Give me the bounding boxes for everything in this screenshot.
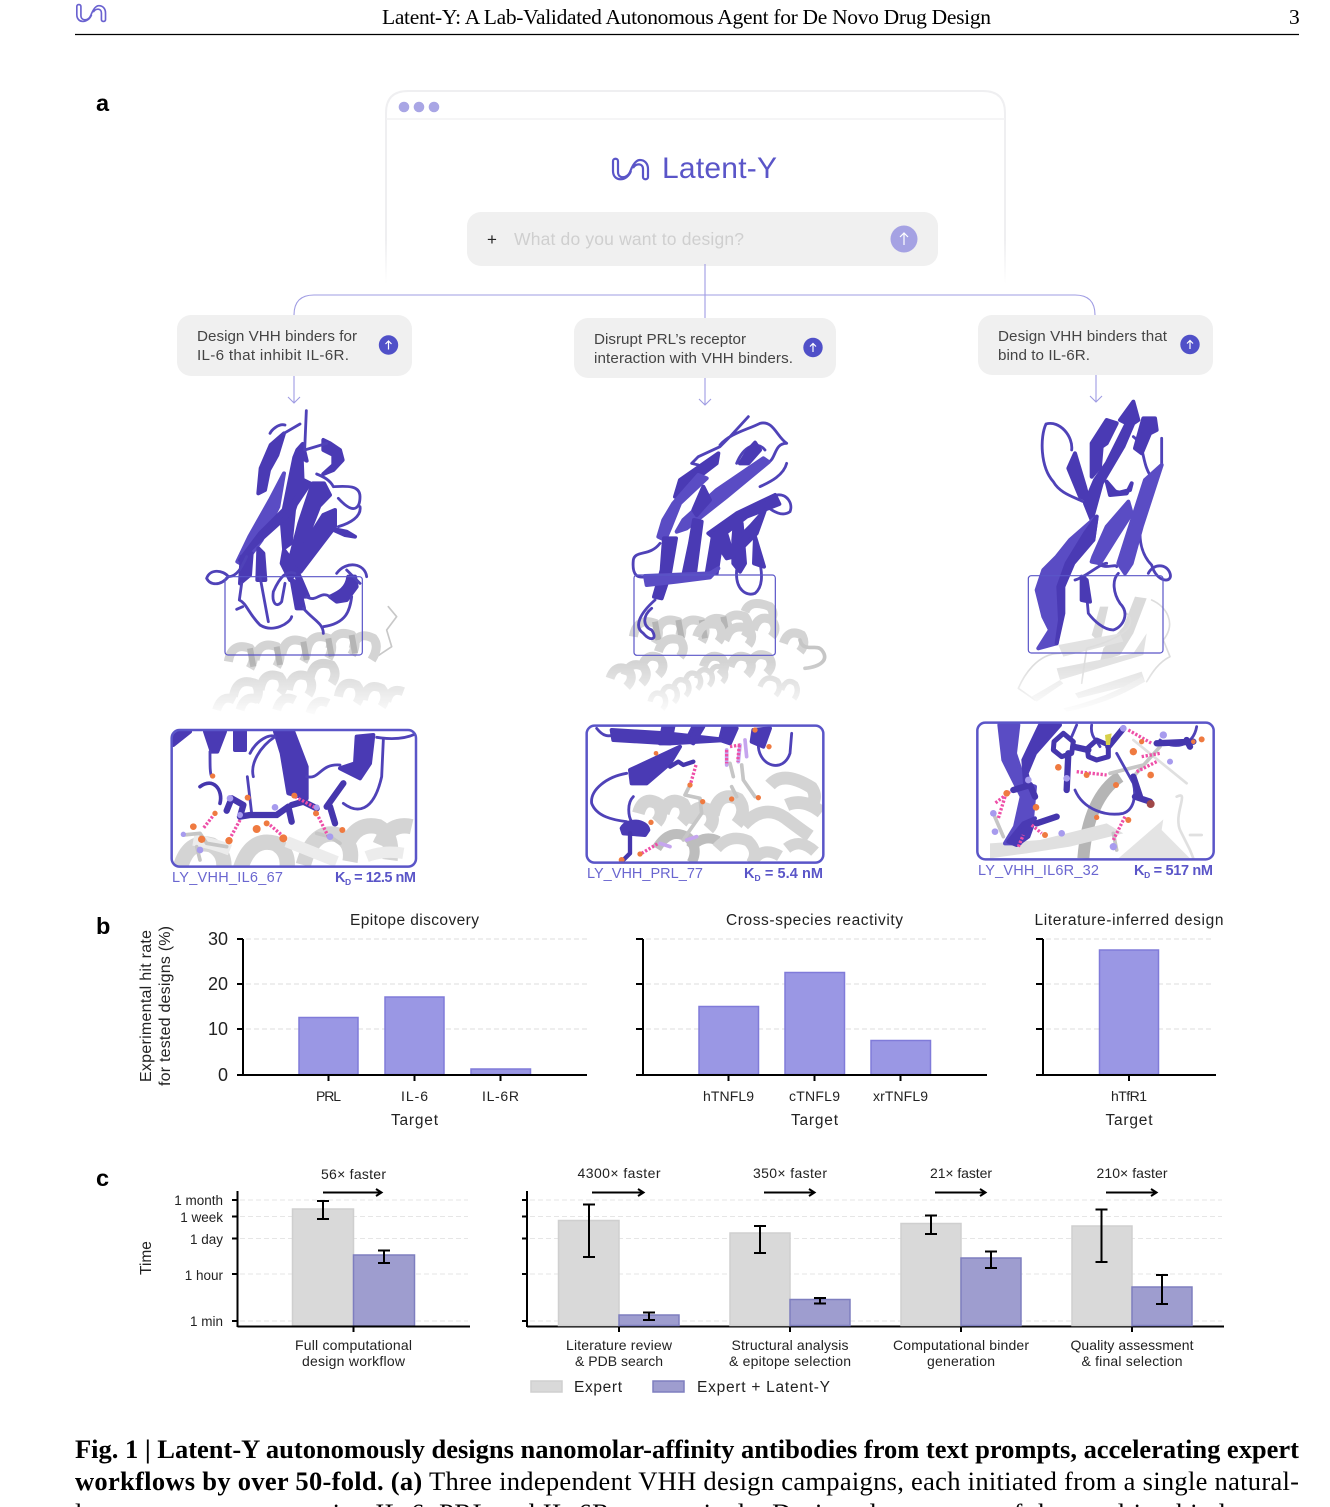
inset 3 caption: K	[1134, 863, 1144, 879]
chart: literature-inferred design: Target	[1106, 1112, 1153, 1129]
target box	[1028, 576, 1163, 653]
figure caption	[75, 1434, 1299, 1507]
group: binder generation: 21× faster	[930, 1165, 992, 1181]
prompt card 2: interaction with VHH binders.	[594, 350, 793, 367]
interface residues	[183, 833, 340, 860]
header title: Latent-Y: A Lab-Validated Autonomous Agent for De Novo Drug Design	[382, 5, 991, 29]
y axis title: for tested designs (%)	[157, 926, 174, 1086]
header logo	[77, 5, 106, 21]
inset 1 caption	[172, 870, 416, 887]
group: quality assessment: Quality assessment	[1070, 1337, 1194, 1353]
page number: 3	[1289, 5, 1300, 29]
ribbon strands	[999, 725, 1035, 843]
inset 3 caption: = 517 nM	[1150, 863, 1213, 879]
ribbon VHH	[207, 411, 367, 633]
prompt card 2	[574, 318, 836, 378]
legend: Expert + Latent-Y	[697, 1379, 830, 1396]
running header	[75, 5, 1300, 34]
group: binder generation: Computational binder	[893, 1337, 1029, 1353]
chart axis: stages	[522, 1191, 1224, 1332]
chart: full workflow: 56× faster	[321, 1166, 386, 1182]
prompt card 2: Disrupt PRL’s receptor	[594, 331, 746, 348]
prompt input	[467, 212, 938, 266]
group: literature review	[558, 1165, 679, 1369]
prompt input: +	[487, 230, 497, 249]
chart: epitope discovery: IL-6	[401, 1088, 428, 1104]
chart: epitope discovery	[208, 912, 587, 1129]
Latent-Y logo	[613, 159, 648, 179]
inset 2 caption	[587, 866, 823, 883]
chart: epitope discovery: 10	[208, 1019, 228, 1039]
panel label a: a	[96, 90, 110, 116]
group: binder generation: generation	[927, 1353, 995, 1369]
y axis title	[138, 926, 174, 1086]
group: quality assessment	[1070, 1165, 1194, 1369]
grey helices	[180, 826, 412, 872]
chart: cross-species reactivity: Target	[791, 1112, 839, 1129]
inset 2	[587, 726, 823, 863]
chart: full workflow: Full computational	[295, 1337, 412, 1353]
grey target	[1083, 777, 1120, 858]
group: literature review: Literature review	[566, 1337, 673, 1353]
interface residues	[1013, 740, 1193, 823]
group: structural analysis: 350× faster	[753, 1165, 827, 1181]
target box	[634, 575, 775, 655]
inset frame	[587, 726, 823, 863]
inset 3 caption: D	[1144, 870, 1150, 880]
group: literature review: & PDB search	[575, 1353, 663, 1369]
structure 1: IL-6 complex	[200, 411, 413, 718]
chart: literature-inferred design	[1034, 912, 1224, 1129]
chart: cross-species reactivity: hTNFL9	[703, 1088, 754, 1104]
prompt card 1: Design VHH binders for	[197, 328, 357, 345]
contacts	[660, 740, 747, 847]
grey target helices	[200, 607, 413, 718]
chart: cross-species reactivity: Cross-species reactivity	[726, 912, 903, 929]
browser window mock-up	[386, 91, 1005, 284]
inset 1 caption: D	[345, 877, 351, 887]
figure caption: workflows by over 50-fold. (a) Three independent VHH design campaigns, each initiated from a single natural-	[75, 1466, 1299, 1496]
structure 2: PRL complex	[603, 417, 830, 717]
figure caption: Fig. 1 | Latent-Y autonomously designs nanomolar-affinity antibodies from text prompts, accelerating expert	[75, 1434, 1299, 1464]
grey target helices	[603, 603, 830, 717]
panel a: design campaigns	[96, 90, 1214, 887]
chart: literature-inferred design: hTfR1	[1111, 1088, 1147, 1104]
grey helices	[638, 778, 822, 836]
prompt card 3: Design VHH binders that	[998, 328, 1168, 345]
prompt input: What do you want to design?	[514, 229, 744, 249]
panel label b: b	[96, 913, 110, 939]
group: structural analysis: Structural analysis	[732, 1337, 848, 1353]
group: quality assessment: 210× faster	[1096, 1165, 1168, 1181]
ribbon VHH	[1037, 402, 1170, 648]
y axis title: Experimental hit rate	[138, 930, 155, 1082]
chart: literature-inferred design: Literature-inferred design	[1034, 912, 1224, 929]
inset 1 caption: = 12.5 nM	[351, 870, 416, 886]
inset frame	[977, 723, 1214, 859]
chart: epitope discovery: Target	[391, 1112, 439, 1129]
group: structural analysis	[729, 1165, 851, 1369]
panel c: time comparison charts	[96, 1165, 1224, 1396]
chart: epitope discovery: 20	[208, 974, 228, 994]
chart: full workflow: 1 hour	[185, 1268, 224, 1283]
grey target sheet	[1013, 597, 1180, 717]
panel b: hit rate bar charts	[96, 912, 1224, 1129]
prompt card 1	[177, 315, 412, 376]
chart: full workflow: design workflow	[302, 1353, 406, 1369]
inset 3 caption	[978, 863, 1213, 880]
inset 2 caption: = 5.4 nM	[761, 866, 823, 882]
arrow down 2	[699, 378, 711, 405]
branching connector	[294, 264, 1095, 318]
chart: full workflow	[174, 1166, 470, 1369]
inset 2 caption: K	[744, 866, 754, 882]
inset 3 caption: LY_VHH_IL6R_32	[978, 863, 1099, 879]
chart: full workflow: 1 month	[174, 1193, 223, 1208]
chart: epitope discovery: IL-6R	[482, 1088, 519, 1104]
inset 1 caption: LY_VHH_IL6_67	[172, 870, 283, 886]
chart: epitope discovery: 0	[218, 1065, 228, 1085]
target box	[225, 577, 362, 655]
ribbon strands	[205, 732, 225, 752]
group: structural analysis: & epitope selection	[729, 1353, 851, 1369]
group: quality assessment: & final selection	[1082, 1353, 1182, 1369]
chart: epitope discovery: 30	[208, 929, 228, 949]
legend	[531, 1379, 830, 1396]
group: literature review: 4300× faster	[578, 1165, 661, 1181]
inset 2 caption: LY_VHH_PRL_77	[587, 866, 703, 882]
arrow down 1	[288, 376, 300, 403]
legend: Expert	[574, 1379, 623, 1396]
prompt card 1: IL-6 that inhibit IL-6R.	[197, 347, 349, 364]
y axis title: Time	[138, 1241, 155, 1275]
chart: full workflow: 1 min	[190, 1314, 223, 1329]
structure 3: IL-6R complex	[1013, 402, 1180, 717]
inset 1	[172, 730, 417, 872]
chart: cross-species reactivity: cTNFL9	[789, 1088, 840, 1104]
inset 2 caption: D	[755, 873, 761, 883]
group: binder generation	[893, 1165, 1029, 1369]
arrow down 3	[1090, 375, 1102, 402]
ribbon VHH	[633, 417, 791, 639]
chart: epitope discovery: Epitope discovery	[350, 912, 479, 929]
inset 1 caption: K	[335, 870, 345, 886]
prompt card 3	[978, 315, 1213, 375]
chart: full workflow: 1 day	[190, 1232, 223, 1247]
inset frame	[172, 730, 416, 867]
inset 3	[977, 723, 1214, 859]
panel label c: c	[96, 1165, 109, 1191]
Latent-Y wordmark: Latent-Y	[662, 152, 777, 185]
prompt card 3: bind to IL-6R.	[998, 347, 1090, 364]
chart: epitope discovery: PRL	[316, 1088, 341, 1104]
chart: full workflow: 1 week	[180, 1210, 223, 1225]
chart: cross-species reactivity: xrTNFL9	[873, 1088, 928, 1104]
chart: cross-species reactivity	[636, 912, 987, 1129]
ribbon strands	[592, 728, 792, 822]
